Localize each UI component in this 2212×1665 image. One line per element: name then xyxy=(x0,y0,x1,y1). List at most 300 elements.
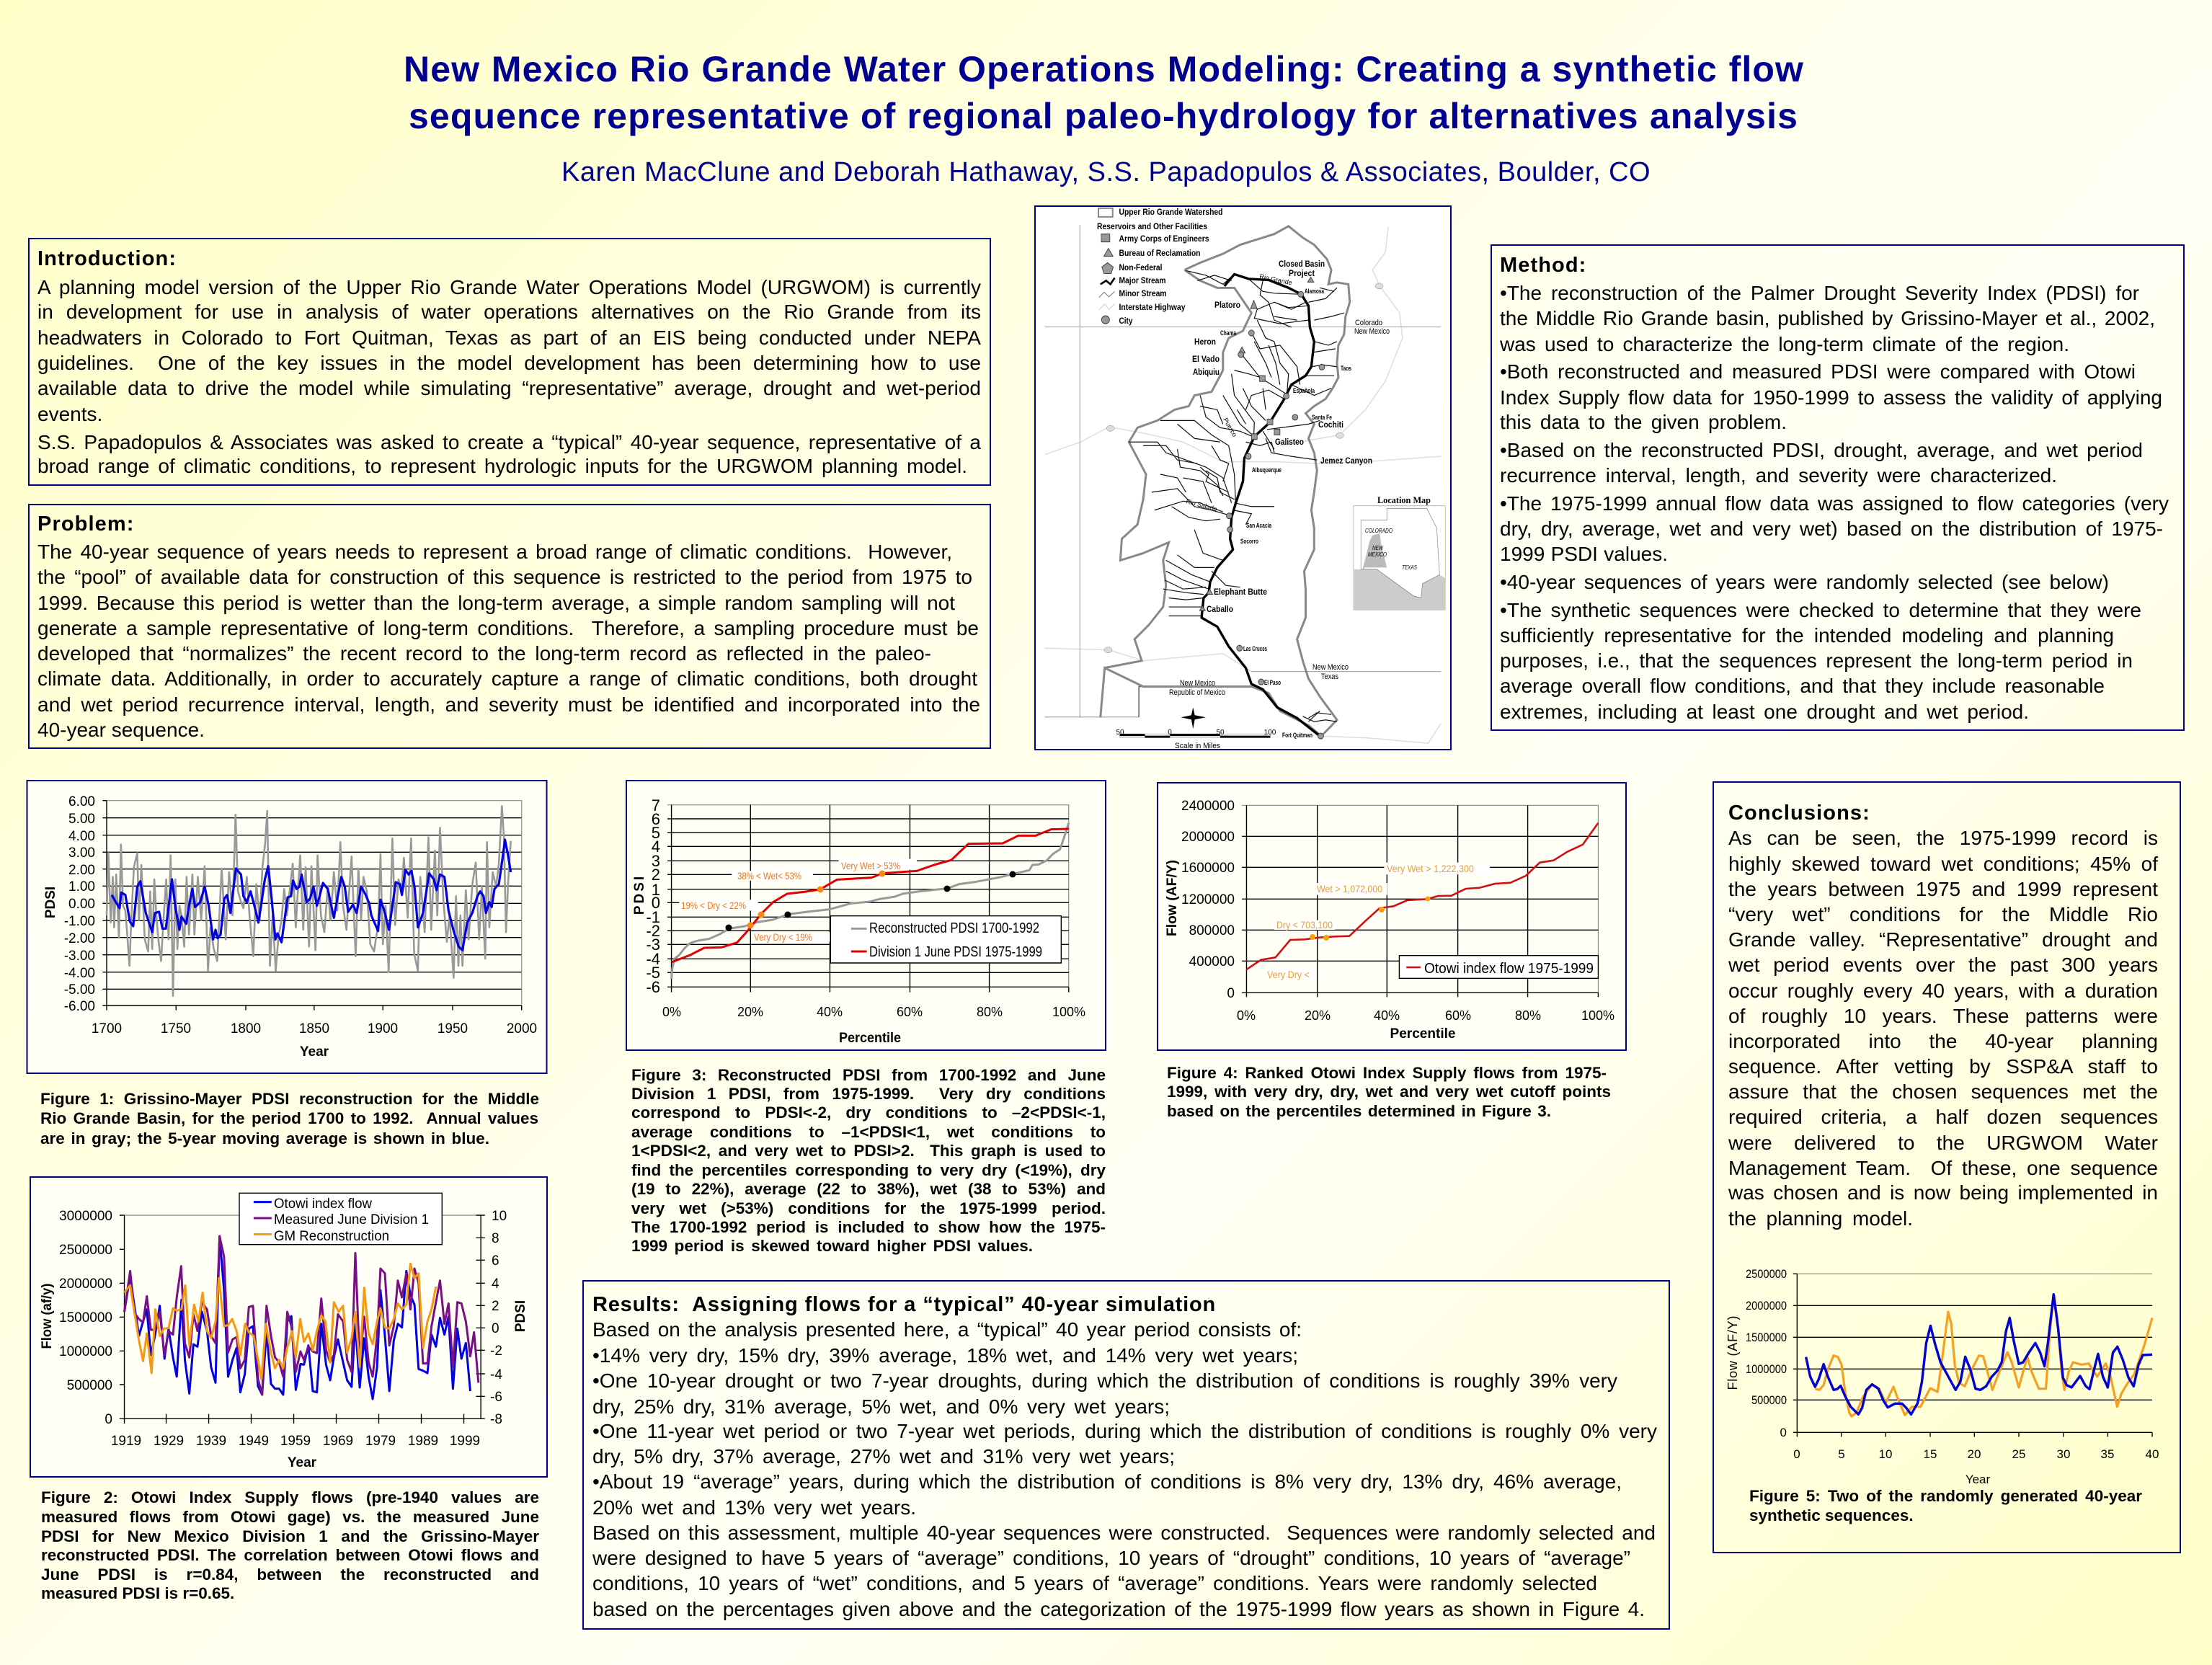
chart: PDSI time series xyxy=(102,800,522,1011)
y axis labels: -5 xyxy=(646,964,660,982)
y axis labels: 7 xyxy=(652,796,660,814)
cutoff labels: Dry < 703,100 xyxy=(1276,919,1333,931)
map labels: 50 xyxy=(1116,729,1124,737)
axis titles xyxy=(1165,860,1456,1042)
map labels: Texas xyxy=(1321,672,1338,681)
axis titles: Percentile xyxy=(839,1031,901,1046)
text: method bullets: Index Supply flow data for 1950-1999 to assess the validity of applying xyxy=(1500,386,2162,409)
map labels: 100 xyxy=(1264,729,1276,737)
text: method bullets: was used to characterize the long-term climate of the region. xyxy=(1500,333,2069,355)
caption: figure 3 xyxy=(631,1066,1106,1255)
text: method bullets: extremes, including at least one drought and wet period. xyxy=(1500,701,2029,723)
map labels: Non-Federal xyxy=(1119,262,1162,272)
y axis labels: 1200000 xyxy=(1181,892,1235,907)
caption: figure 3: The 1700-1992 period is included to show how the 1975- xyxy=(631,1218,1106,1236)
map labels: Chama xyxy=(1220,329,1237,337)
text: method bullets: 1999 PSDI values. xyxy=(1500,543,1668,565)
text: results body: dry, 5% dry, 37% average, 27% wet and 31% very wet years; xyxy=(592,1445,1175,1468)
text: introduction body: headwaters in Colorado to Fort Quitman, Texas as part of an EIS being conducted under NEPA xyxy=(37,327,981,349)
map: facility symbols xyxy=(1101,234,1446,740)
x axis labels: 2000 xyxy=(507,1021,537,1036)
map: watershed, rivers and boundaries xyxy=(1045,208,1442,744)
right axis labels: -8 xyxy=(490,1412,502,1427)
text: results body: •One 11-year wet period or two 7-year wet periods, during which the distribution of conditions is roughly 0% very xyxy=(592,1420,1657,1442)
map labels: Albuquerque xyxy=(1252,466,1282,474)
text: method bullets: •The 1975-1999 annual flow data was assigned to flow categories (very xyxy=(1500,492,2169,515)
chart: figure 5 synthetic sequences xyxy=(1725,1267,2159,1486)
map labels xyxy=(1097,207,1431,750)
cutoff labels: 19% < Dry < 22% xyxy=(681,900,746,911)
y axis labels xyxy=(1746,1267,1787,1439)
x axis labels: 1959 xyxy=(280,1434,311,1449)
text: problem body: The 40-year sequence of years needs to represent a broad range of climatic conditions. However, xyxy=(37,541,952,563)
x axis labels: 1989 xyxy=(408,1434,438,1449)
x axis labels: 15 xyxy=(1924,1447,1937,1461)
x axis labels: 60% xyxy=(1445,1008,1471,1023)
x axis labels: 100% xyxy=(1581,1008,1614,1023)
right axis labels xyxy=(490,1209,507,1427)
y axis labels: 2 xyxy=(652,866,660,884)
x axis labels: 40 xyxy=(2146,1447,2159,1461)
caption: figure 4 xyxy=(1167,1064,1611,1120)
y axis labels xyxy=(646,796,660,996)
cutoff labels: Very Dry < 19% xyxy=(754,931,812,943)
map labels: Colorado xyxy=(1355,319,1382,327)
chart: percentile curves xyxy=(667,804,1070,993)
heading: method: Method: xyxy=(1500,254,1586,277)
y axis labels: 5.00 xyxy=(68,812,95,827)
map labels: COLORADO xyxy=(1365,528,1393,534)
map labels: NEW xyxy=(1372,545,1384,551)
y axis labels xyxy=(1181,799,1235,1001)
x axis labels xyxy=(1793,1447,2159,1461)
caption: figure 1: Figure 1: Grissino-Mayer PDSI reconstruction for the Middle xyxy=(40,1090,539,1108)
text: introduction body: broad range of climatic conditions, to represent hydrologic inputs for the URGWOM planning model. xyxy=(37,455,967,477)
y axis labels: 2400000 xyxy=(1181,799,1235,814)
y axis labels: 500000 xyxy=(1751,1393,1787,1407)
right axis labels: 10 xyxy=(492,1209,507,1224)
x axis labels xyxy=(111,1434,480,1449)
map labels: Republic of Mexico xyxy=(1169,688,1225,697)
left axis labels: 1500000 xyxy=(59,1310,112,1326)
map labels: 50 xyxy=(1216,729,1225,737)
map labels: Platoro xyxy=(1214,300,1240,310)
text: problem body: 40-year sequence. xyxy=(37,719,205,741)
panel: conclusions xyxy=(1713,781,2181,1553)
axis titles: PDSI xyxy=(513,1300,528,1332)
text: conclusions body: the planning model. xyxy=(1728,1207,1913,1230)
map labels: Elephant Butte xyxy=(1214,587,1267,597)
x axis labels: 1999 xyxy=(450,1434,480,1449)
x axis labels: 80% xyxy=(1515,1008,1541,1023)
caption: figure 2: PDSI for New Mexico Division 1 and the Grissino-Mayer xyxy=(41,1527,539,1545)
x axis labels: 1949 xyxy=(239,1434,269,1449)
y axis labels: -1.00 xyxy=(64,914,95,929)
title: New Mexico Rio Grande Water Operations Modeling: Creating a synthetic flow xyxy=(404,49,1804,89)
text: method bullets xyxy=(1500,282,2169,723)
y axis labels: -2.00 xyxy=(64,931,95,946)
cutoff labels: Wet > 1,072,000 xyxy=(1317,883,1382,894)
x axis labels: 5 xyxy=(1838,1447,1845,1461)
y axis labels: 4.00 xyxy=(68,829,95,844)
x axis labels: 25 xyxy=(2012,1447,2025,1461)
map labels: Puerco xyxy=(1222,417,1238,438)
x axis labels: 0% xyxy=(1237,1008,1256,1023)
caption: figure 3: (19 to 22%), average (22 to 38%), wet (38 to 53%) and xyxy=(631,1180,1106,1198)
caption: figure 1 xyxy=(40,1090,539,1147)
left axis labels: 2500000 xyxy=(59,1243,112,1258)
text: method bullets: sufficiently representative for the intended modeling and planning xyxy=(1500,624,2114,647)
text: introduction body: S.S. Papadopulos & Associates was asked to create a “typical” 40-year sequence, representative of a xyxy=(37,431,981,453)
axis titles: Percentile xyxy=(1390,1026,1456,1042)
caption: figure 3: average conditions to –1<PDSI<1, wet conditions to xyxy=(631,1123,1106,1141)
map labels: Alamosa xyxy=(1305,288,1325,295)
caption: figure 3: correspond to PDSI<-2, dry conditions to –2<PDSI<-1, xyxy=(631,1104,1106,1122)
y axis labels: -2 xyxy=(646,922,660,940)
caption: figure 3: 1999 period is skewed toward higher PDSI values. xyxy=(631,1237,1033,1255)
left axis labels: 3000000 xyxy=(59,1209,112,1224)
text: results body: •About 19 “average” years, during which the distribution of conditions is 8% very dry, 13% dry, 46% average, xyxy=(592,1470,1622,1493)
map labels: Army Corps of Engineers xyxy=(1119,234,1209,244)
caption: figure 3: 1<PDSI<2, and very wet to PDSI>2. This graph is used to xyxy=(631,1142,1106,1160)
text: conclusions body: As can be seen, the 1975-1999 record is xyxy=(1728,827,2158,849)
text: method bullets: recurrence interval, length, and severity were characterized. xyxy=(1500,464,2057,487)
y axis labels: 2000000 xyxy=(1746,1299,1787,1313)
y axis labels: 1.00 xyxy=(68,879,95,894)
axis titles: Year xyxy=(1966,1473,1991,1486)
map labels: Project xyxy=(1289,268,1315,278)
text: conclusions body: was chosen and is now being implemented in xyxy=(1728,1181,2158,1204)
cutoff labels: 38% < Wet< 53% xyxy=(737,870,801,882)
axis titles: Year xyxy=(288,1455,317,1470)
text: method bullets: purposes, i.e., that the sequences represent the long-term period in xyxy=(1500,649,2133,672)
text: conclusions body: wet period events over the past 300 years xyxy=(1728,954,2158,976)
text: conclusions body: were delivered to the URGWOM Water xyxy=(1728,1132,2158,1154)
legend labels xyxy=(869,920,1042,960)
map labels: Rio Salado xyxy=(1185,497,1218,512)
caption: figure 2: reconstructed PDSI. The correlation between Otowi flows and xyxy=(41,1546,539,1564)
y axis labels: 4 xyxy=(652,838,660,856)
north arrow xyxy=(1181,707,1206,729)
panel: figure 2 chart xyxy=(30,1176,548,1478)
map labels: MEXICO xyxy=(1368,551,1387,558)
axis titles xyxy=(632,874,901,1046)
map labels: New Mexico xyxy=(1354,327,1390,336)
y axis labels: 3.00 xyxy=(68,845,95,861)
left axis labels: 2000000 xyxy=(59,1276,112,1292)
text: results body: •One 10-year drought or two 7-year droughts, during which the distribution of conditions is roughly 39% very xyxy=(592,1369,1617,1392)
y axis labels: 1600000 xyxy=(1181,861,1235,876)
x axis labels: 1919 xyxy=(111,1434,141,1449)
text: problem body: 1999. Because this period is wetter than the long-term average, a simple random sampling will not xyxy=(37,592,955,614)
text: method bullets: •The reconstruction of the Palmer Drought Severity Index (PDSI) for xyxy=(1500,282,2139,304)
map labels: Galisteo xyxy=(1275,437,1304,447)
caption: figure 3: Figure 3: Reconstructed PDSI from 1700-1992 and June xyxy=(631,1066,1106,1084)
text: introduction body: A planning model version of the Upper Rio Grande Water Operations Model (URGWOM) is currently xyxy=(37,276,981,298)
map labels: Heron xyxy=(1194,337,1216,347)
x axis labels: 1700 xyxy=(92,1021,122,1036)
right axis labels: 0 xyxy=(492,1321,499,1336)
map labels: Minor Stream xyxy=(1119,288,1166,298)
legend label: Otowi index flow 1975-1999 xyxy=(1424,961,1594,977)
text: introduction body: guidelines. One of the key issues in the model development has been determining how to use xyxy=(37,352,981,374)
left axis labels: 1000000 xyxy=(59,1344,112,1359)
right axis labels: -6 xyxy=(490,1390,502,1405)
map labels: San Acacia xyxy=(1246,522,1272,529)
y axis labels: -4 xyxy=(646,950,660,968)
caption: figure 1: are in gray; the 5-year moving average is shown in blue. xyxy=(40,1129,489,1147)
x axis labels xyxy=(1237,1008,1614,1023)
legend labels xyxy=(274,1196,429,1244)
y axis labels: -6 xyxy=(646,978,660,996)
caption: figure 2: measured PDSI is r=0.65. xyxy=(41,1584,234,1602)
x axis labels: 35 xyxy=(2101,1447,2114,1461)
x axis labels: 1969 xyxy=(323,1434,353,1449)
text: method bullets: dry, dry, average, wet and very wet) based on the distribution of 1975- xyxy=(1500,518,2163,540)
panel: introduction xyxy=(28,238,991,486)
y axis labels: 6 xyxy=(652,810,660,828)
text: method bullets: •The synthetic sequences were checked to determine that they were xyxy=(1500,599,2141,621)
heading: conclusions: Conclusions: xyxy=(1728,802,1870,825)
x axis labels: 10 xyxy=(1879,1447,1892,1461)
caption: figure 5: Figure 5: Two of the randomly generated 40-year xyxy=(1749,1487,2142,1505)
map labels: New Mexico xyxy=(1312,663,1349,672)
y axis labels xyxy=(64,794,95,1014)
scale bar xyxy=(1120,734,1270,738)
authors: Karen MacClune and Deborah Hathaway, S.S. Papadopulos & Associates, Boulder, CO xyxy=(561,157,1651,187)
text: conclusions body: assure that the chosen sequences met the xyxy=(1728,1080,2158,1103)
map labels: Upper Rio Grande Watershed xyxy=(1119,207,1222,217)
right axis labels: -4 xyxy=(490,1367,502,1382)
curve markers xyxy=(1310,897,1430,941)
legend labels: Measured June Division 1 xyxy=(274,1212,429,1227)
cutoff labels: Very Dry < xyxy=(1267,969,1310,980)
text: introduction body xyxy=(37,276,981,477)
text: method bullets: •40-year sequences of years were randomly selected (see below) xyxy=(1500,571,2109,593)
map labels: Cochiti xyxy=(1318,419,1343,430)
y axis labels: 0 xyxy=(652,894,660,912)
x axis labels: 20% xyxy=(1305,1008,1331,1023)
map labels: 0 xyxy=(1168,729,1172,737)
x axis labels: 1750 xyxy=(161,1021,191,1036)
axis titles: PDSI xyxy=(632,874,647,915)
y axis labels: 5 xyxy=(652,824,660,842)
map labels: New Mexico xyxy=(1180,679,1215,688)
text: method bullets: the Middle Rio Grande basin, published by Grissino-Mayer et al., 2002, xyxy=(1500,307,2155,329)
text: conclusions body: Management Team. Of these, one sequence xyxy=(1728,1157,2158,1179)
y axis labels: -5.00 xyxy=(64,982,95,998)
text: results body: •14% very dry, 15% dry, 39% average, 18% wet, and 14% very wet years; xyxy=(592,1344,1298,1367)
panel: method xyxy=(1491,244,2185,731)
map labels: Abiquiu xyxy=(1193,367,1220,377)
caption: figure 3: Division 1 PDSI, from 1975-1999. Very dry conditions xyxy=(631,1085,1106,1103)
text: conclusions body: the years between 1975 and 1999 represent xyxy=(1728,878,2158,900)
legend labels: Otowi index flow xyxy=(274,1196,372,1212)
axis titles xyxy=(43,887,329,1060)
y axis labels: 2.00 xyxy=(68,863,95,878)
x axis labels xyxy=(92,1021,537,1036)
text: problem body: generate a sample representative of long-term conditions. Therefore, a sampling procedure must be xyxy=(37,617,979,639)
x axis labels: 1850 xyxy=(299,1021,329,1036)
text: introduction body: events. xyxy=(37,403,102,425)
caption: figure 2: June PDSI is r=0.84, between the reconstructed and xyxy=(41,1566,539,1584)
right axis labels: -2 xyxy=(490,1344,502,1359)
left axis labels xyxy=(59,1209,112,1427)
panel: figure 3 chart xyxy=(626,780,1106,1051)
y axis labels: 0 xyxy=(1227,986,1235,1001)
y axis labels: 1500000 xyxy=(1746,1331,1787,1344)
x axis labels: 1800 xyxy=(231,1021,261,1036)
text: problem body: climate data. Additionally, in order to accurately capture a range of climatic conditions, both drought xyxy=(37,667,977,690)
y axis labels: -1 xyxy=(646,908,660,926)
text: problem body: developed that “normalizes” the recent record to the long-term record as reflected in the paleo- xyxy=(37,642,931,665)
map labels: Reservoirs and Other Facilities xyxy=(1097,221,1207,231)
text: conclusions body: occur roughly every 40 years, with a duration xyxy=(1728,980,2158,1002)
map labels: Jemez Canyon xyxy=(1320,456,1372,466)
map labels: Scale in Miles xyxy=(1175,742,1220,750)
y axis labels: 1000000 xyxy=(1746,1362,1787,1376)
x axis labels: 40% xyxy=(1374,1008,1400,1023)
y axis labels: 2000000 xyxy=(1181,830,1235,845)
left axis labels: 500000 xyxy=(67,1378,112,1393)
right axis labels: 2 xyxy=(492,1299,499,1314)
y axis labels: 400000 xyxy=(1189,954,1235,969)
text: results body: based on the percentages given above and the categorization of the 1975-1999 flow years as shown in Figure 4. xyxy=(592,1598,1645,1620)
chart: flows and PDSI time series xyxy=(120,1192,485,1424)
text: results body: 20% wet and 13% very wet years. xyxy=(592,1496,916,1519)
cutoff labels: Very Wet > 53% xyxy=(841,860,900,871)
panel: results xyxy=(582,1280,1670,1630)
map labels: Española xyxy=(1293,387,1315,394)
text: results body: conditions, 10 years of “wet” conditions, and 5 years of “average” conditions. Years were randomly selected xyxy=(592,1572,1597,1594)
panel: problem xyxy=(28,504,991,749)
y axis labels: 0.00 xyxy=(68,897,95,912)
x axis labels: 1900 xyxy=(368,1021,398,1036)
map labels: El Paso xyxy=(1264,679,1281,686)
right axis labels: 8 xyxy=(492,1231,499,1246)
heading: problem: Problem: xyxy=(37,512,134,536)
text: problem body xyxy=(37,541,980,741)
x axis labels: 1950 xyxy=(437,1021,468,1036)
text: results body: Based on the analysis presented here, a “typical” 40 year period consists of: xyxy=(592,1318,1302,1341)
text: method bullets: •Both reconstructed and measured PDSI were compared with Otowi xyxy=(1500,360,2136,383)
y axis labels: 2500000 xyxy=(1746,1267,1787,1281)
x axis labels xyxy=(662,1005,1085,1019)
text: results body: dry, 25% dry, 31% average, 5% wet, and 0% very wet years; xyxy=(592,1395,1170,1418)
map labels: Bureau of Reclamation xyxy=(1119,248,1201,258)
map labels: Major Stream xyxy=(1119,275,1166,285)
map labels: Las Cruces xyxy=(1243,645,1267,652)
axis titles: Flow (af/y) xyxy=(40,1283,55,1349)
map labels: Fort Quitman xyxy=(1282,732,1312,739)
caption: figure 2: Figure 2: Otowi Index Supply flows (pre-1940 values are xyxy=(41,1488,539,1506)
x axis labels: 1929 xyxy=(154,1434,184,1449)
right axis labels: 4 xyxy=(492,1276,499,1292)
x axis labels: 0% xyxy=(662,1005,681,1019)
text: results body: Based on this assessment, multiple 40-year sequences were constructed. Sequences were randomly selected and xyxy=(592,1522,1656,1544)
panel: figure 1 chart xyxy=(26,780,548,1074)
axis titles xyxy=(40,1283,528,1470)
axis titles: PDSI xyxy=(43,887,58,918)
y axis labels: 6.00 xyxy=(68,794,95,809)
text: problem body: the “pool” of available data for construction of this sequence is restricted to the period from 1975 to xyxy=(37,566,972,588)
y axis labels: 3 xyxy=(652,852,660,870)
caption: figure 3: find the percentiles corresponding to very dry (<19%), dry xyxy=(631,1161,1106,1179)
x axis labels: 1979 xyxy=(365,1434,396,1449)
x axis labels: 40% xyxy=(817,1005,843,1019)
axis titles: Year xyxy=(300,1044,329,1060)
text: conclusions body xyxy=(1728,827,2158,1230)
y axis labels: -3 xyxy=(646,936,660,954)
panel: figure 4 chart xyxy=(1157,782,1627,1051)
x axis labels: 30 xyxy=(2057,1447,2070,1461)
text: conclusions body: sequence. After vetting by SSP&A staff to xyxy=(1728,1055,2158,1078)
text: conclusions body: highly skewed toward wet conditions; 45% of xyxy=(1728,853,2158,875)
map labels: Rio Grande xyxy=(1259,272,1293,287)
curve markers xyxy=(725,871,1016,931)
text: method bullets: average overall flow conditions, and that they include reasonable xyxy=(1500,675,2105,697)
legend labels: Reconstructed PDSI 1700-1992 xyxy=(869,920,1039,936)
text: conclusions body: of roughly 10 years. These patterns were xyxy=(1728,1005,2158,1027)
text: method bullets: this data to the given problem. xyxy=(1500,411,1787,433)
heading: introduction: Introduction: xyxy=(37,247,177,270)
map labels: Interstate Highway xyxy=(1119,302,1186,312)
y axis labels: 1 xyxy=(652,881,660,899)
map labels: Socorro xyxy=(1240,538,1258,545)
legend labels: GM Reconstruction xyxy=(274,1229,389,1244)
caption: figure 4: based on the percentiles determined in Figure 3. xyxy=(1167,1102,1551,1120)
text: results body xyxy=(592,1318,1657,1620)
axis titles: Flow (AF/Y) xyxy=(1725,1316,1740,1390)
caption: figure 2 xyxy=(41,1488,539,1602)
caption: figure 1: Rio Grande Basin, for the period 1700 to 1992. Annual values xyxy=(40,1109,538,1127)
panel: study area map xyxy=(1034,205,1452,750)
y axis labels: 0 xyxy=(1780,1426,1787,1439)
left axis labels: 0 xyxy=(105,1412,112,1427)
cutoff labels: Very Wet > 1,222,300 xyxy=(1387,863,1474,874)
text: conclusions body: incorporated into the 40-year planning xyxy=(1728,1030,2158,1052)
caption: figure 4: 1999, with very dry, dry, wet and very wet cutoff points xyxy=(1167,1083,1611,1101)
x axis labels: 80% xyxy=(977,1005,1003,1019)
x axis labels: 0 xyxy=(1793,1447,1800,1461)
caption: figure 5 xyxy=(1749,1487,2142,1524)
y axis labels: -3.00 xyxy=(64,949,95,964)
cutoff labels xyxy=(681,860,900,943)
cutoff labels xyxy=(1267,863,1474,980)
text: conclusions body: “very wet” conditions for the Middle Rio xyxy=(1728,903,2158,925)
text: introduction body: available data to drive the model while simulating “representative” average, drought and wet-period xyxy=(37,377,981,399)
map labels: Location Map xyxy=(1377,494,1431,505)
chart: ranked flows xyxy=(1242,804,1599,998)
x axis labels: 20 xyxy=(1968,1447,1981,1461)
x axis labels: 20% xyxy=(737,1005,763,1019)
title xyxy=(404,49,1804,136)
legend labels: Division 1 June PDSI 1975-1999 xyxy=(869,944,1042,960)
heading: results: Results: Assigning flows for a “typical” 40-year simulation xyxy=(592,1293,1216,1316)
caption: figure 3: very wet (>53%) conditions for the 1975-1999 period. xyxy=(631,1199,1106,1217)
text: conclusions body: Grande valley. “Representative” drought and xyxy=(1728,928,2158,951)
map labels: City xyxy=(1119,316,1133,326)
y axis labels: -4.00 xyxy=(64,966,95,981)
text: method bullets: •Based on the reconstructed PDSI, drought, average, and wet period xyxy=(1500,439,2143,461)
location map inset shapes xyxy=(1354,506,1445,610)
x axis labels: 1939 xyxy=(196,1434,226,1449)
map labels: El Vado xyxy=(1192,354,1220,364)
caption: figure 5: synthetic sequences. xyxy=(1749,1506,1914,1524)
right axis labels: 6 xyxy=(492,1253,499,1269)
map labels: Santa Fe xyxy=(1312,414,1332,421)
map labels: Taos xyxy=(1341,365,1351,372)
